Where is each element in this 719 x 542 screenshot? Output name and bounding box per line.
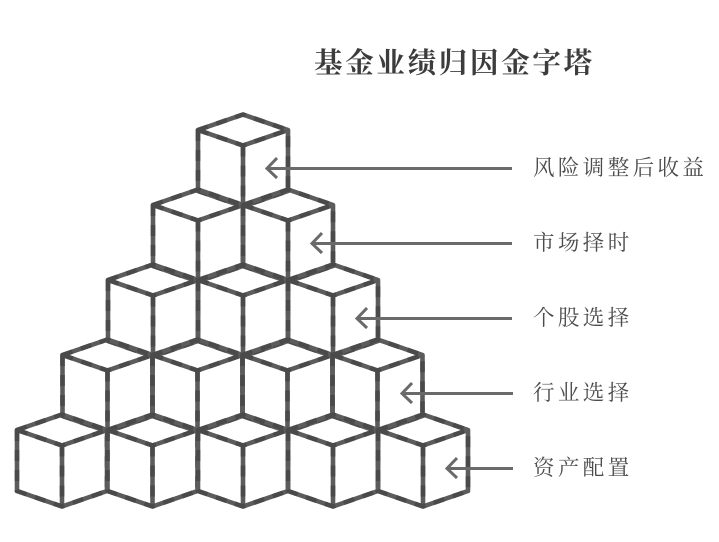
label: sector selection: 行业选择 (533, 381, 633, 405)
label: market timing: 市场择时 (533, 231, 633, 255)
arrow: sector selection (402, 383, 513, 403)
label: asset allocation: 资产配置 (533, 456, 633, 480)
arrow: risk-adjusted return (267, 158, 512, 178)
arrow: asset allocation (447, 458, 513, 478)
pyramid of cubes (17, 114, 468, 506)
row 4 cubes (62, 340, 422, 432)
label: risk-adjusted return: 风险调整后收益 (533, 156, 707, 180)
arrow: stock selection (357, 308, 512, 328)
row 2 cubes (153, 190, 333, 282)
arrow: market timing (312, 233, 512, 253)
row 5 cubes (17, 414, 468, 506)
row 1 cube (198, 114, 288, 206)
row 3 cubes (108, 264, 378, 356)
title: 基金业绩归因金字塔 (314, 48, 595, 80)
label: stock selection: 个股选择 (533, 306, 633, 330)
